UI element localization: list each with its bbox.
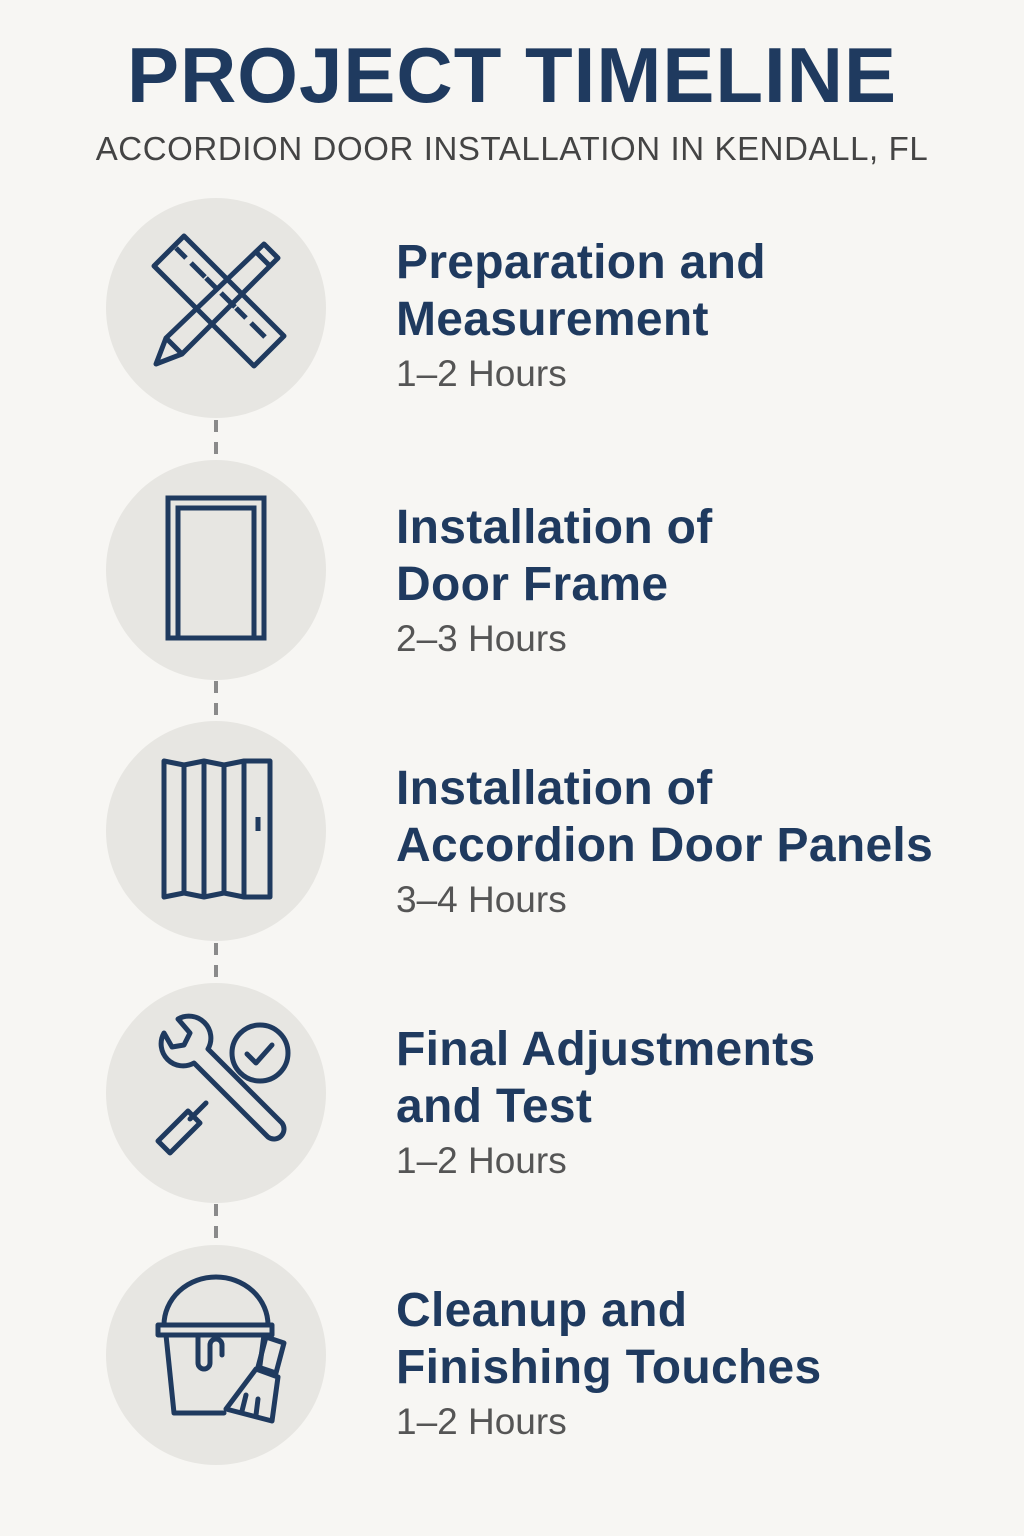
step 1 text: 1–2 Hours bbox=[396, 353, 567, 394]
connector 2 bbox=[214, 681, 218, 721]
step 3 text: Accordion Door Panels bbox=[396, 819, 933, 872]
connector 1 bbox=[214, 420, 218, 460]
icon: bucket and brush bbox=[106, 1245, 326, 1465]
connector 3 bbox=[214, 943, 218, 983]
subtitle: ACCORDION DOOR INSTALLATION IN KENDALL, FL bbox=[96, 130, 928, 167]
icon: wrench, screwdriver, check bbox=[106, 983, 326, 1203]
step 2 text bbox=[396, 501, 712, 659]
step 4 text: 1–2 Hours bbox=[396, 1140, 567, 1181]
step 3 text: Installation of bbox=[396, 762, 712, 815]
step 5 text bbox=[396, 1284, 822, 1442]
step 1 text bbox=[396, 236, 766, 394]
icon: accordion panels bbox=[106, 721, 326, 941]
step 1 text: Preparation and bbox=[396, 236, 766, 289]
step 2 text: Door Frame bbox=[396, 558, 668, 611]
icon: door frame bbox=[106, 460, 326, 680]
step 5 text: Finishing Touches bbox=[396, 1341, 822, 1394]
title: PROJECT TIMELINE bbox=[127, 31, 897, 119]
step 4 text bbox=[396, 1023, 815, 1181]
step 1 text: Measurement bbox=[396, 293, 709, 346]
step 3 text: 3–4 Hours bbox=[396, 879, 567, 920]
step 5 text: 1–2 Hours bbox=[396, 1401, 567, 1442]
step 4 text: Final Adjustments bbox=[396, 1023, 815, 1076]
step 2 text: Installation of bbox=[396, 501, 712, 554]
icon: ruler and pencil bbox=[106, 198, 326, 418]
step 5 text: Cleanup and bbox=[396, 1284, 687, 1337]
step 4 text: and Test bbox=[396, 1080, 592, 1133]
connector 4 bbox=[214, 1204, 218, 1244]
step 3 text bbox=[396, 762, 933, 920]
step 2 text: 2–3 Hours bbox=[396, 618, 567, 659]
